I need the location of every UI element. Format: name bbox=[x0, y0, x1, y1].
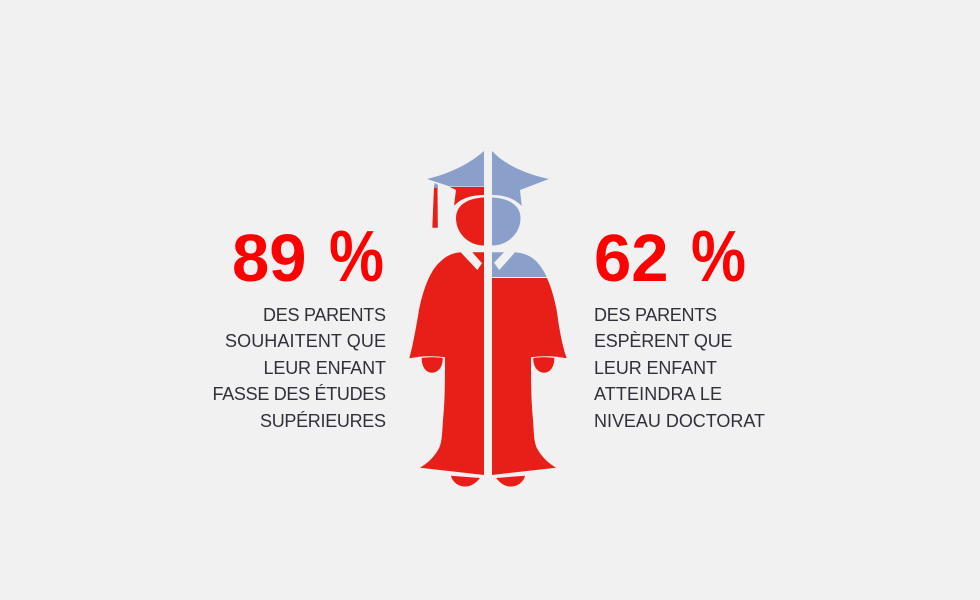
gown right, red bbox=[492, 278, 567, 475]
left description: SUPÉRIEURES bbox=[260, 411, 386, 431]
left description: DES PARENTS bbox=[263, 305, 386, 325]
head right, blue bbox=[492, 198, 520, 246]
left percentage: 89 %: % bbox=[329, 217, 384, 297]
mortarboard left, blue bbox=[427, 151, 484, 186]
head left, red bbox=[456, 198, 484, 246]
gown shoulder right, blue bbox=[492, 252, 547, 277]
left statistic bbox=[212, 217, 386, 431]
right percentage: 62 %: 62 bbox=[594, 221, 669, 296]
graduate figure bbox=[409, 151, 567, 486]
left description bbox=[212, 305, 386, 431]
tassel bbox=[432, 183, 438, 228]
right half of figure: 62% red bbox=[492, 151, 567, 486]
sleeve cuff right bbox=[533, 357, 554, 373]
left description: FASSE DES ÉTUDES bbox=[212, 384, 386, 404]
right description: LEUR ENFANT bbox=[594, 358, 717, 378]
cap band left, red bbox=[450, 187, 484, 206]
left half of figure: 89% red bbox=[409, 151, 484, 486]
mortarboard right, blue bbox=[492, 151, 549, 206]
right percentage: 62 %: % bbox=[691, 217, 746, 297]
right description bbox=[594, 305, 765, 431]
right description: ATTEINDRA LE bbox=[594, 384, 722, 404]
sleeve cuff left bbox=[422, 357, 443, 373]
tassel cord, blue bbox=[434, 183, 438, 188]
left description: SOUHAITENT QUE bbox=[225, 331, 386, 351]
right description: NIVEAU DOCTORAT bbox=[594, 411, 765, 431]
foot right bbox=[496, 476, 525, 486]
right statistic bbox=[594, 217, 765, 431]
gown left, red bbox=[409, 252, 484, 475]
right description: ESPÈRENT QUE bbox=[594, 331, 732, 351]
left percentage: 89 %: 89 bbox=[232, 221, 307, 296]
right description: DES PARENTS bbox=[594, 305, 717, 325]
foot left bbox=[451, 476, 480, 486]
left description: LEUR ENFANT bbox=[264, 358, 386, 378]
